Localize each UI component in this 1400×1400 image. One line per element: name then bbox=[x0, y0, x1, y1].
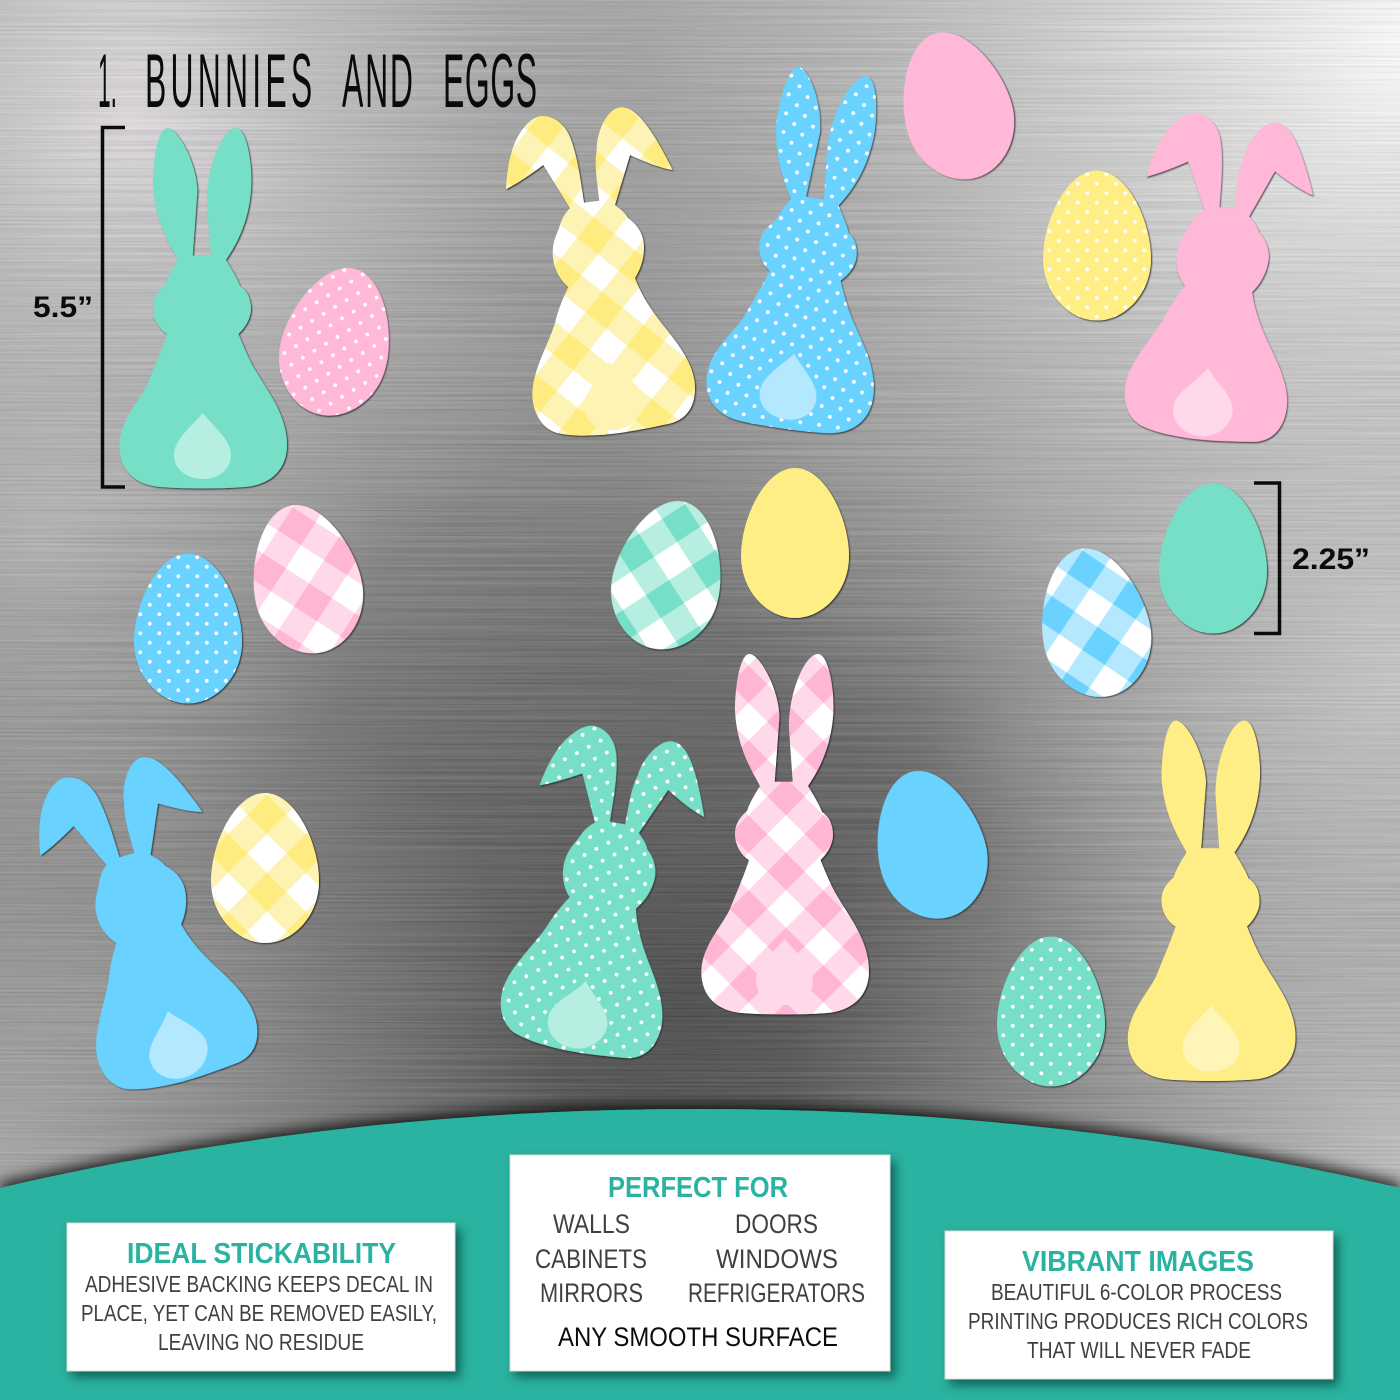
dimension label: 2.25 inches: 2.25” bbox=[1292, 543, 1370, 576]
heading: perfect for: PERFECT FOR bbox=[608, 1172, 788, 1204]
bunny: solid yellow bbox=[1128, 720, 1296, 1081]
egg: pink gingham bbox=[238, 494, 374, 664]
surface list: REFRIGERATORS bbox=[688, 1278, 865, 1308]
bunny: blue dots bbox=[701, 60, 917, 440]
egg: solid blue bbox=[859, 759, 1001, 930]
dimension bracket: egg height bbox=[1254, 483, 1280, 634]
surface list bbox=[535, 1209, 865, 1308]
surface list: DOORS bbox=[735, 1209, 818, 1239]
heading: vibrant images: VIBRANT IMAGES bbox=[1022, 1246, 1254, 1278]
body text: adhesive backing: PLACE, YET CAN BE REMOVED EASILY, bbox=[81, 1300, 437, 1326]
panel: ideal stickability bbox=[67, 1223, 455, 1371]
body text: adhesive backing: ADHESIVE BACKING KEEPS DECAL IN bbox=[85, 1271, 433, 1297]
body text: beautiful process: BEAUTIFUL 6-COLOR PROCESS bbox=[991, 1279, 1282, 1305]
bunny: pink gingham bbox=[701, 654, 869, 1014]
surface list: CABINETS bbox=[535, 1244, 647, 1274]
egg: solid pink bbox=[883, 19, 1029, 192]
surface list: WINDOWS bbox=[716, 1244, 838, 1274]
body text: beautiful process bbox=[968, 1279, 1308, 1363]
egg: yellow dots bbox=[1043, 170, 1151, 320]
egg: yellow gingham bbox=[211, 793, 319, 943]
body text: adhesive backing bbox=[81, 1271, 437, 1355]
bunny: solid pink bbox=[1091, 97, 1349, 459]
body text: adhesive backing: LEAVING NO RESIDUE bbox=[158, 1329, 364, 1355]
egg: teal dots bbox=[997, 936, 1105, 1086]
dimension bracket: bunny height bbox=[102, 128, 125, 487]
surface list: MIRRORS bbox=[540, 1278, 643, 1308]
title: EGGS bbox=[443, 39, 537, 124]
egg: pink dots bbox=[266, 256, 407, 427]
title: 1. bbox=[98, 39, 117, 124]
title: AND bbox=[342, 39, 413, 124]
title: BUNNIES bbox=[145, 39, 312, 124]
egg: solid teal bbox=[1159, 484, 1267, 634]
dimension label: 5.5 inches: 5.5” bbox=[33, 291, 93, 324]
bunny: yellow gingham bbox=[506, 107, 695, 436]
egg: solid yellow bbox=[741, 468, 849, 618]
heading: ideal stickability: IDEAL STICKABILITY bbox=[127, 1238, 396, 1270]
egg: teal gingham bbox=[600, 490, 736, 660]
surface list: WALLS bbox=[553, 1209, 630, 1239]
teal footer arc bbox=[0, 1109, 1400, 1400]
panel: perfect for bbox=[510, 1155, 890, 1371]
egg: blue dots bbox=[134, 554, 242, 704]
egg: blue gingham bbox=[1027, 539, 1162, 706]
body text: beautiful process: PRINTING PRODUCES RICH COLORS bbox=[968, 1308, 1308, 1334]
bunny: teal dots bbox=[466, 707, 744, 1077]
title bbox=[98, 39, 537, 124]
bunny: solid blue bbox=[28, 747, 264, 1099]
bunny: solid teal bbox=[119, 128, 287, 488]
any smooth surface line: ANY SMOOTH SURFACE bbox=[558, 1322, 838, 1352]
body text: beautiful process: THAT WILL NEVER FADE bbox=[1027, 1337, 1251, 1363]
panel: vibrant images bbox=[945, 1231, 1333, 1379]
